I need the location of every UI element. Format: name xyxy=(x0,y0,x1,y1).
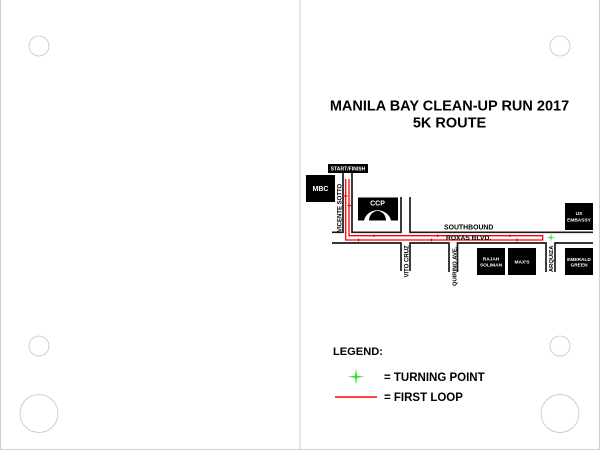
landmark: Emerald Green xyxy=(565,248,593,275)
landmark: US Embassy: EMBASSY xyxy=(567,217,592,223)
title: 5K ROUTE xyxy=(413,116,486,132)
first loop route xyxy=(344,179,543,242)
street label: Vicente Sotto: VICENTE SOTTO xyxy=(338,183,344,232)
start/finish marker xyxy=(328,164,368,173)
road network xyxy=(332,173,593,272)
landmark: CCP xyxy=(358,198,398,220)
landmark: Rajah Soliman: RAJAH xyxy=(483,256,500,262)
legend: turning point: = TURNING POINT xyxy=(384,372,485,384)
landmark: US Embassy: US xyxy=(576,211,583,217)
landmark: US Embassy xyxy=(565,203,593,230)
landmark: MBC xyxy=(306,175,335,202)
landmark: Max's xyxy=(508,248,536,275)
title xyxy=(330,98,569,132)
street label: Arquiza: ARQUIZA xyxy=(549,245,555,272)
title: MANILA BAY CLEAN-UP RUN 2017 xyxy=(330,98,569,114)
start/finish marker: START/FINISH xyxy=(331,167,366,173)
landmark: Rajah Soliman: SOLIMAN xyxy=(480,262,503,268)
landmark: Rajah Soliman xyxy=(477,248,505,275)
legend heading: LEGEND: xyxy=(333,346,383,358)
icon: turning point on map xyxy=(548,234,554,241)
street label: Southbound: SOUTHBOUND xyxy=(444,224,493,232)
landmark: Emerald Green: GREEN xyxy=(570,262,588,268)
street label: Quirino Ave: QUIRINO AVE. xyxy=(452,246,458,286)
landmark: Emerald Green: EMERALD xyxy=(567,257,591,263)
legend: first loop xyxy=(335,392,463,404)
street label: Vito Cruz: VITO CRUZ xyxy=(404,245,410,278)
landmark: MBC: MBC xyxy=(313,186,328,193)
landmark: CCP: CCP xyxy=(370,200,385,208)
legend: turning point xyxy=(348,368,485,385)
landmark: Max's: MAX'S xyxy=(514,260,530,266)
legend: first loop: = FIRST LOOP xyxy=(384,392,463,404)
street label: Roxas Blvd: ROXAS BLVD. xyxy=(446,235,491,242)
